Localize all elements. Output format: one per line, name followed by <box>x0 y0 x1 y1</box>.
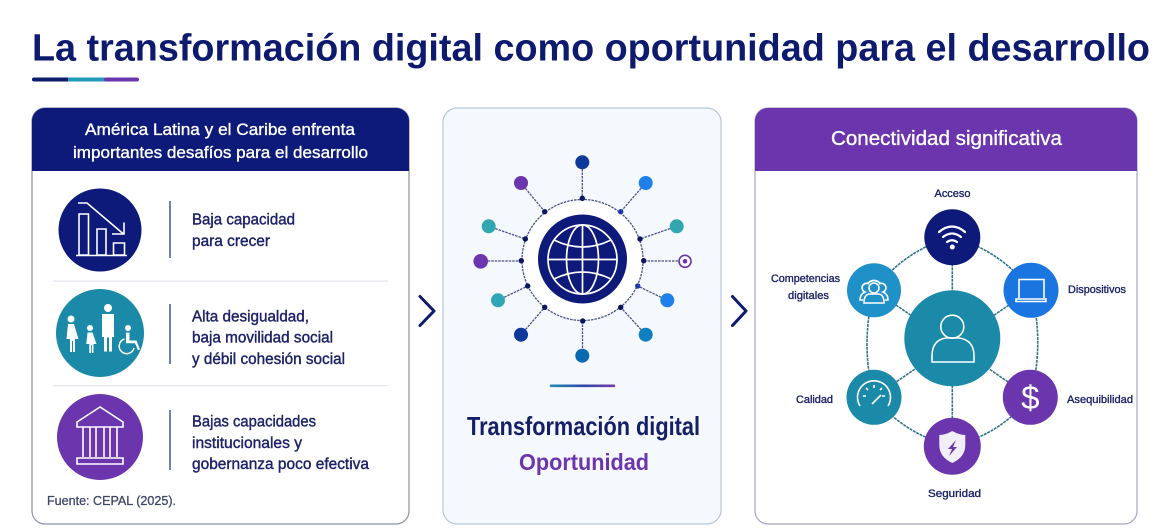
text: alta desigualdad <box>192 308 345 368</box>
text: bajas capacidades: Bajas capacidades <box>192 414 316 430</box>
panel: transformación digital <box>443 108 721 524</box>
icon: declining bars <box>58 188 142 272</box>
node: asequibilidad: $ <box>1021 379 1039 416</box>
title underline <box>32 78 139 82</box>
network globe diagram <box>473 155 691 363</box>
node: dispositivos <box>1004 263 1126 318</box>
text: bajas capacidades: gobernanza poco efectiva <box>192 456 369 473</box>
node: calidad <box>796 370 902 425</box>
node: competencias digitales <box>771 263 901 317</box>
text: baja capacidad: para crecer <box>192 233 270 250</box>
text: baja capacidad <box>192 212 295 250</box>
node: seguridad <box>924 418 981 500</box>
heading: transformación digital: Transformación digital <box>467 411 700 441</box>
node: asequibilidad <box>1003 370 1133 425</box>
title: La transformación digital como oportunidad para el desarrollo <box>32 28 1150 70</box>
source: Fuente: CEPAL (2025). <box>47 493 176 508</box>
panel header: importantes desafíos para el desarrollo <box>73 143 368 162</box>
panel: conectividad significativa <box>755 108 1137 524</box>
panel header: Conectividad significativa <box>831 128 1063 150</box>
node: dispositivos: Dispositivos <box>1068 284 1126 296</box>
subheading: oportunidad: Oportunidad <box>519 449 649 475</box>
connectivity diagram <box>771 188 1133 500</box>
center user <box>904 290 1000 386</box>
node: acceso: Acceso <box>934 188 970 200</box>
node: competencias digitales: Competencias <box>771 273 840 285</box>
text: alta desigualdad: Alta desigualdad, <box>192 308 309 326</box>
icon: people <box>56 289 144 377</box>
icon: globe <box>538 214 627 304</box>
node: acceso <box>924 188 980 265</box>
text: bajas capacidades: institucionales y <box>192 435 302 452</box>
panel header: América Latina y el Caribe enfrenta <box>85 120 356 139</box>
panel: desafíos <box>32 108 409 524</box>
node: competencias digitales: digitales <box>788 290 830 302</box>
text: baja capacidad: Baja capacidad <box>192 212 295 228</box>
panel header <box>32 108 409 171</box>
arrow: first chevron <box>420 296 434 326</box>
gradient divider <box>550 384 615 387</box>
icon: institution <box>57 394 143 480</box>
text: bajas capacidades <box>192 414 369 473</box>
node: asequibilidad: Asequibilidad <box>1067 394 1133 406</box>
node: calidad: Calidad <box>796 394 833 406</box>
node: seguridad: Seguridad <box>928 488 981 500</box>
arrow: second chevron <box>732 296 746 326</box>
text: alta desigualdad: baja movilidad social <box>192 330 333 346</box>
panel header <box>755 108 1137 171</box>
text: alta desigualdad: y débil cohesión social <box>192 351 345 368</box>
